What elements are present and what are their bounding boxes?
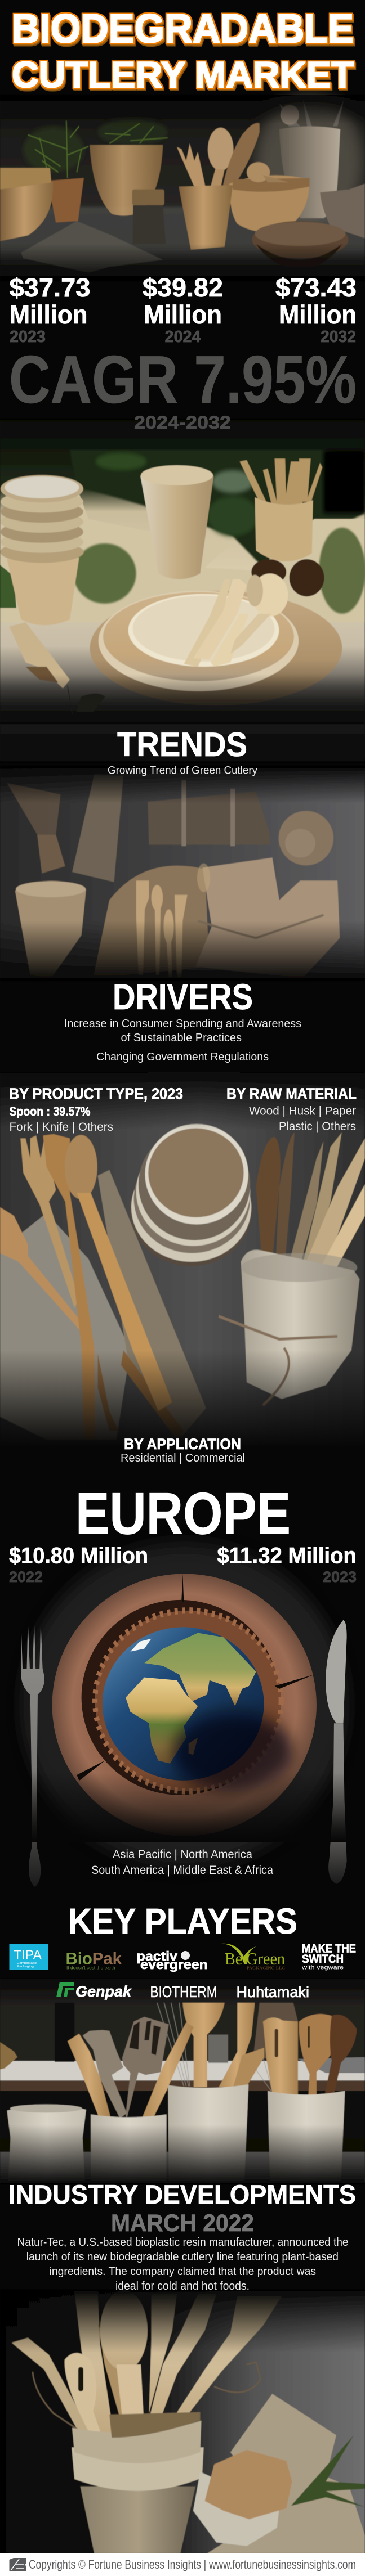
date: MARCH 2022 [111,2210,254,2237]
Europe stat 2023: 2023 [323,1568,357,1585]
title [12,7,354,95]
development text: launch of its new biodegradable cutlery line featuring plant-based [26,2251,339,2263]
by raw material: Wood | Husk | Paper [249,1105,356,1118]
other regions: Asia Pacific | North America [113,1848,252,1861]
stat: 2024: $39.82 [143,273,223,302]
logo: BeGreen: PACKAGING LLC [247,1966,285,1971]
logo: Biotherm: BIOTHERM [150,1983,217,2000]
stat: 2032: $73.43 [275,273,357,302]
photo: globe on cracked clay plate [21,1544,347,1887]
photo: stacked bowls, wooden cutlery and cup [0,1072,365,1446]
logo: Genpak [56,1982,132,2000]
footer logo [9,2558,26,2571]
logo: Vegware: with vegware [301,1965,344,1971]
stat: 2023: $37.73 [9,273,90,302]
by product type: Spoon : 39.57% [9,1104,90,1118]
stat: 2024: Million [144,300,222,329]
stat: 2032 [275,273,357,346]
logo: TIPA: TIPA [14,1948,42,1963]
trends heading: TRENDS [117,726,247,763]
Europe stat 2022 [9,1544,148,1585]
logo: BeGreen: Be Green [225,1949,285,1968]
fade: lower plate [0,1772,365,1842]
logo: Vegware [301,1943,356,1971]
logo: Pactiv Evergreen [136,1949,208,1972]
stat: 2023: Million [9,300,88,329]
other regions [91,1848,273,1877]
stat: 2032: Million [279,300,357,329]
logo: Vegware: MAKE THE [302,1943,356,1955]
footer bar [0,2553,365,2576]
development text: ingredients. The company claimed that the product was [50,2265,316,2278]
logo: Genpak: Genpak [75,1983,132,2000]
by application [121,1436,245,1464]
development text: Natur-Tec, a U.S.-based bioplastic resin manufacturer, announced the [17,2236,348,2249]
icon: knife [326,1620,347,1884]
by product type: Fork | Knife | Others [9,1121,113,1134]
key players heading: KEY PLAYERS [68,1901,297,1941]
logo: TIPA [9,1944,48,1970]
logo: BioPak: BioPak [65,1950,122,1968]
photo: kraft paper packaging flat lay [0,766,365,981]
photo: wooden tableware on a table [0,95,365,281]
title: BIODEGRADABLE [12,7,354,52]
logo: Vegware: SWITCH [302,1953,344,1966]
CAGR: 2024-2032 [134,412,231,433]
Europe heading: EUROPE [75,1481,291,1547]
logo: TIPA: Compostable [17,1962,37,1965]
by application: Residential | Commercial [121,1452,245,1464]
photo: kitchen utensils in white crocks [0,1979,365,2184]
drivers text: of Sustainable Practices [121,1032,242,1044]
icon: fork [21,1620,44,1887]
stat: 2024 [143,273,223,346]
other regions: South America | Middle East & Africa [91,1864,273,1877]
drivers text [64,1018,301,1063]
title: CUTLERY MARKET [12,54,354,95]
by raw material [226,1085,357,1133]
Europe stat 2022: 2022 [9,1568,43,1585]
Europe stat 2023: $11.32 Million [217,1544,357,1568]
photo: bamboo cutlery in cup with napkin [0,2289,365,2553]
stat: 2023 [9,273,90,346]
photo: bamboo plates, cups and cutlery [0,419,365,763]
stat: 2023: 2023 [10,328,46,346]
logo: Huhtamaki: Huhtamaki [237,1984,309,2000]
drivers text: Increase in Consumer Spending and Awareness [64,1018,301,1030]
plate with globe [52,1574,317,1836]
logo: BioPak: It doesn't cost the earth [66,1966,115,1971]
trends text: Growing Trend of Green Cutlery [108,765,257,776]
stat: 2024: 2024 [164,328,201,346]
drivers heading: DRIVERS [113,977,253,1017]
development text [17,2236,348,2292]
logo: Pactiv Evergreen: evergreen [140,1957,208,1972]
logo: BeGreen [221,1944,285,1971]
drivers text: Changing Government Regulations [96,1051,269,1063]
by application: BY APPLICATION [124,1436,241,1453]
fade: lower cutlery photo [0,1350,365,1449]
by raw material: Plastic | Others [279,1120,356,1133]
development text: ideal for cold and hot foods. [115,2280,250,2292]
by product type [9,1085,183,1134]
industry developments heading: INDUSTRY DEVELOPMENTS [8,2179,356,2209]
by product type: BY PRODUCT TYPE, 2023 [9,1085,183,1103]
logo: Pactiv Evergreen: pactiv [136,1949,177,1963]
Europe stat 2023 [217,1544,357,1585]
logo: TIPA: Packaging [17,1965,34,1968]
Europe stat 2022: $10.80 Million [9,1544,148,1568]
stat: 2032: 2032 [321,328,356,346]
